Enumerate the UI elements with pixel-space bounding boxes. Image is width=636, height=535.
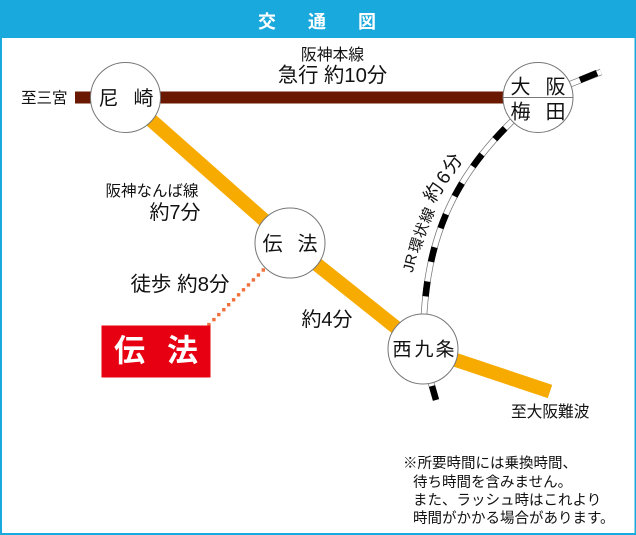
note: ※所要時間には乗換時間、 <box>403 455 577 472</box>
station: Nishikujo: 西 <box>392 340 412 360</box>
station: Osaka Umeda: 田 <box>546 102 566 124</box>
line: JR loop line <box>423 72 601 400</box>
label: JR loop line 6 minutes: 約 <box>419 179 448 206</box>
note: また、ラッシュ時はこれより <box>413 492 601 509</box>
label: to Sannomiya: 至三宮 <box>21 89 68 107</box>
station: Denpo: 伝 <box>262 232 282 256</box>
line: Hanshin Namba line <box>126 98 550 392</box>
station: Denpo: 法 <box>298 232 318 256</box>
station: Osaka Umeda <box>503 62 573 132</box>
label: JR loop line 6 minutes <box>400 149 467 274</box>
label: JR loop line 6 minutes: 分 <box>438 149 467 178</box>
destination: Denpo: 伝 <box>114 334 145 368</box>
station: Nishikujo <box>388 314 458 384</box>
station: Denpo <box>255 208 325 278</box>
station: Nishikujo: 九 <box>414 338 434 360</box>
destination: Denpo: 法 <box>167 334 198 368</box>
label: JR loop line 6 minutes: JR <box>400 252 421 274</box>
title bar <box>0 0 636 38</box>
station: Osaka Umeda: 梅 <box>510 100 530 124</box>
title bar: 図 <box>358 12 376 32</box>
walking route dotted line <box>207 268 265 326</box>
station: Amagasaki <box>90 62 160 132</box>
station: Osaka Umeda: 大 <box>510 76 530 98</box>
label: JR loop line 6 minutes: 6 <box>433 168 456 188</box>
label: about 7 minutes: 約7分 <box>149 201 201 224</box>
label: to Osaka Namba: 至大阪難波 <box>511 403 590 421</box>
note: 時間がかかる場合があります。 <box>413 510 615 527</box>
note: 待ち時間を含みません。 <box>413 474 572 491</box>
station: Nishikujo: 条 <box>435 338 455 360</box>
label: Hanshin main line: 阪神本線 <box>301 46 364 64</box>
label: about 4 minutes: 約4分 <box>301 308 353 331</box>
label: walk 8 minutes: 徒歩 約8分 <box>130 273 230 296</box>
label: express 10 minutes: 急行 約10分 <box>278 64 387 87</box>
label: JR loop line 6 minutes: 線 <box>417 205 439 226</box>
station: Osaka Umeda: 阪 <box>546 76 566 98</box>
station: Amagasaki: 崎 <box>134 87 154 110</box>
label: JR loop line 6 minutes: 状 <box>411 220 433 240</box>
label: Hanshin Namba line: 阪神なんば線 <box>105 182 199 200</box>
line: Hanshin main line <box>75 92 510 104</box>
title bar: 交 <box>258 12 276 32</box>
note <box>403 455 615 527</box>
title bar: 通 <box>308 12 326 32</box>
label: JR loop line 6 minutes: 環 <box>407 236 427 255</box>
station: Amagasaki: 尼 <box>98 88 118 110</box>
destination: Denpo <box>102 326 210 378</box>
